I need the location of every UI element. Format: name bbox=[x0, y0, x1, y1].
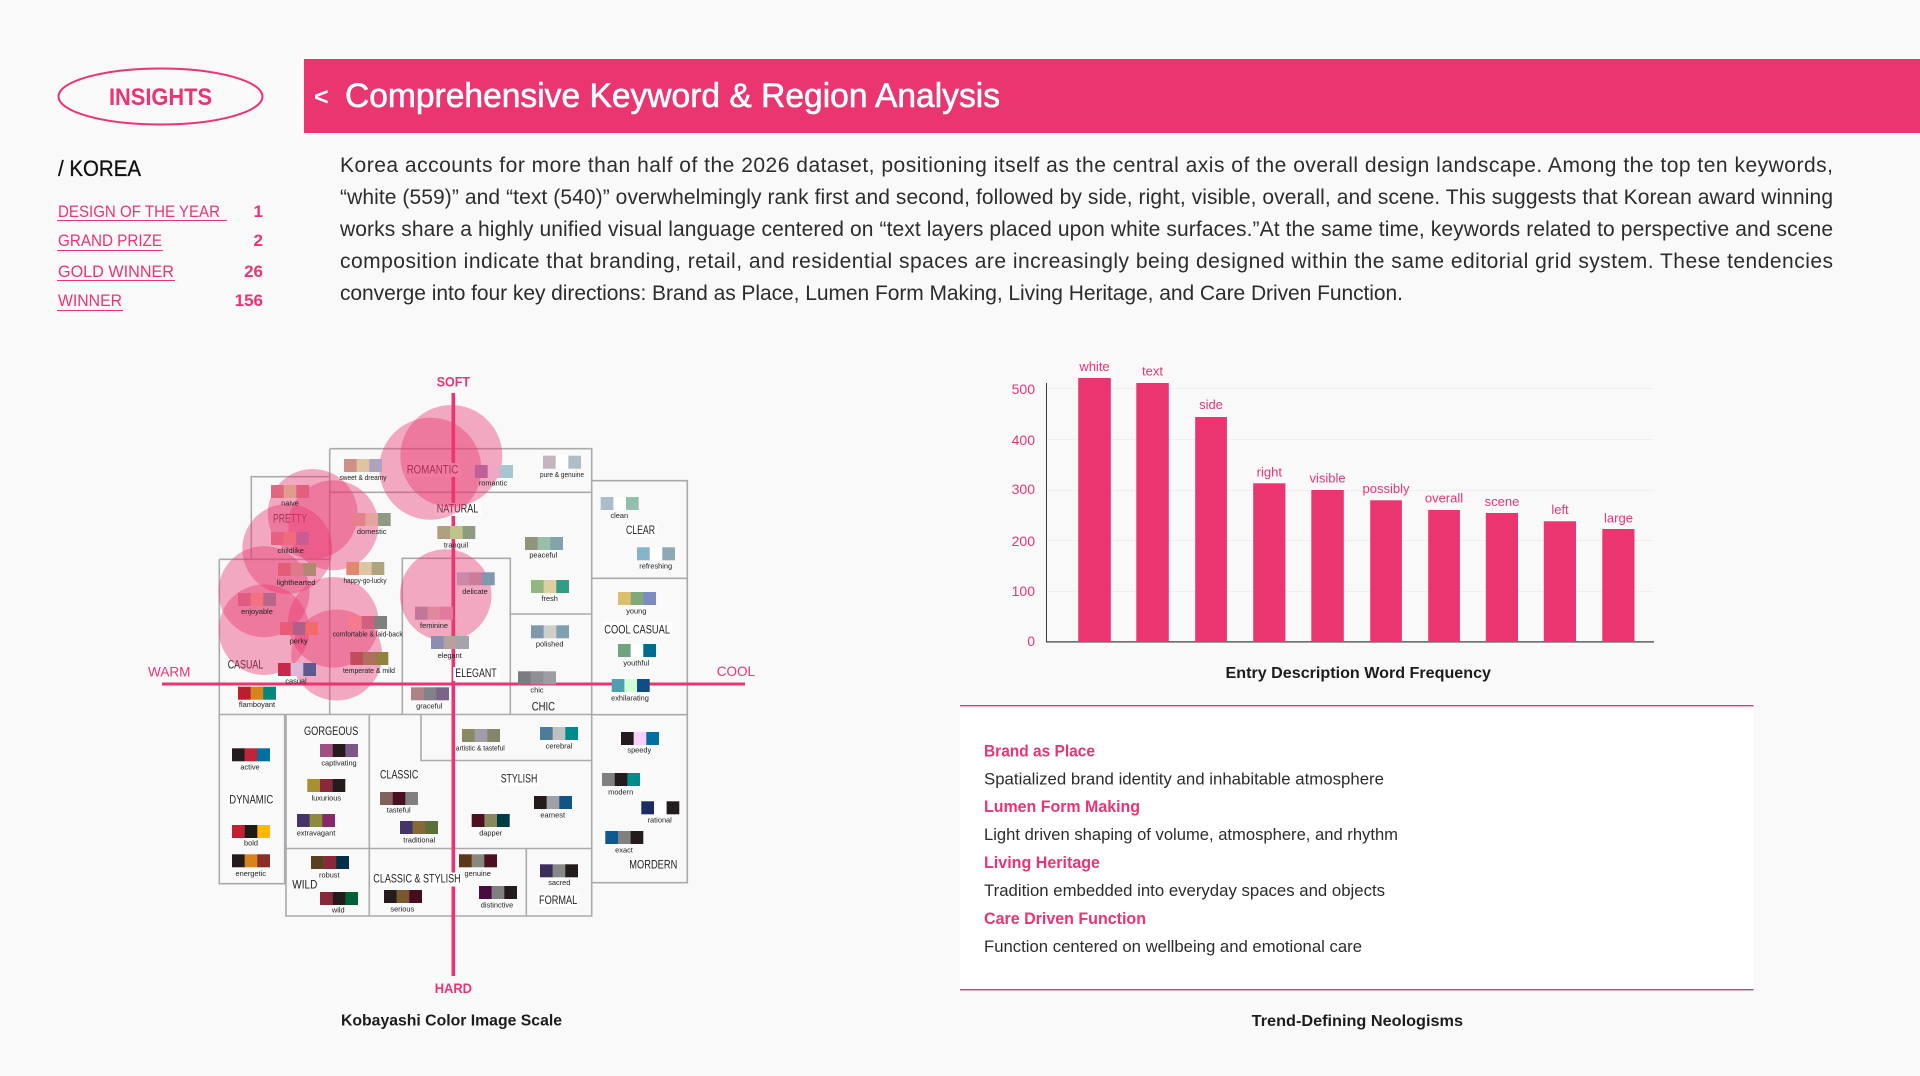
swatch: clean: clean bbox=[610, 511, 628, 520]
bar: scene bbox=[1485, 494, 1519, 642]
swatch: peaceful: peaceful bbox=[529, 551, 558, 560]
trend: Living Heritage: Tradition embedded into everyday spaces and objects bbox=[984, 881, 1385, 900]
y axis tick labels: 200 bbox=[1012, 533, 1035, 549]
category names: STYLISH bbox=[501, 774, 537, 786]
intro paragraph: works share a highly unified visual language centered on “text layers placed upon white surfaces.”At the same time, keywords related to perspective and scene bbox=[339, 218, 1833, 241]
swatch: lighthearted: lighthearted bbox=[277, 578, 315, 587]
trend: Brand as Place: Spatialized brand identity and inhabitable atmosphere bbox=[984, 769, 1384, 788]
intro paragraph bbox=[339, 154, 1833, 305]
swatch: naive bbox=[271, 485, 309, 508]
white label backings bbox=[228, 463, 672, 907]
bar: left bbox=[1544, 502, 1576, 642]
swatch: comfortable & laid-back bbox=[333, 616, 403, 639]
swatch: flamboyant: flamboyant bbox=[239, 700, 275, 709]
swatch: chic bbox=[518, 671, 556, 695]
bar: overall: overall bbox=[1425, 491, 1463, 506]
bar: large: large bbox=[1604, 511, 1633, 526]
caption: Kobayashi Color Image Scale: Kobayashi Color Image Scale bbox=[341, 1013, 562, 1030]
award: winner: 156 bbox=[235, 291, 263, 310]
swatch: captivating bbox=[320, 744, 358, 768]
bar: white: white bbox=[1078, 359, 1110, 374]
y axis tick labels: 500 bbox=[1012, 381, 1035, 397]
swatch: childlike bbox=[271, 532, 309, 555]
swatch: feminine: feminine bbox=[420, 621, 448, 630]
swatch: speedy: speedy bbox=[627, 746, 652, 755]
y axis tick labels: 400 bbox=[1012, 432, 1035, 448]
swatch: artistic & tasteful: artistic & tasteful bbox=[456, 744, 505, 753]
swatch: youthful bbox=[618, 644, 656, 668]
bar: large bbox=[1602, 511, 1634, 642]
award: grand prize: 2 bbox=[254, 231, 263, 250]
swatch: dapper bbox=[472, 814, 510, 837]
swatch: pure & genuine bbox=[540, 456, 584, 479]
category names: GORGEOUS bbox=[304, 726, 359, 738]
swatch: tasteful bbox=[380, 792, 418, 815]
swatch: graceful: graceful bbox=[416, 702, 443, 711]
intro paragraph: converge into four key directions: Brand as Place, Lumen Form Making, Living Heritage, and Care Driven Function. bbox=[340, 282, 1403, 305]
bar: side: side bbox=[1199, 397, 1223, 412]
bar: white bbox=[1078, 359, 1111, 642]
swatch: feminine bbox=[415, 607, 453, 630]
bar chart: word frequency bbox=[1012, 359, 1654, 649]
swatch: enjoyable: enjoyable bbox=[241, 607, 273, 616]
swatch: temperate & mild bbox=[343, 652, 395, 675]
swatch: luxurious: luxurious bbox=[312, 793, 341, 802]
category names: MORDERN bbox=[629, 860, 677, 872]
category names: PRETTY bbox=[273, 513, 307, 525]
swatch: domestic: domestic bbox=[357, 527, 387, 536]
award: design of the year: 1 bbox=[254, 202, 263, 221]
swatch: flamboyant bbox=[238, 687, 276, 709]
swatch: exhilarating bbox=[611, 679, 650, 703]
category names: CASUAL bbox=[228, 660, 264, 672]
horizontal axis: warm to cool bbox=[162, 682, 745, 686]
swatch: perky: perky bbox=[290, 637, 308, 646]
swatch: naive: naive bbox=[281, 499, 299, 508]
category names: CLASSIC & STYLISH bbox=[373, 873, 461, 885]
bar: possibly: possibly bbox=[1363, 481, 1410, 496]
chart gridlines bbox=[1047, 388, 1654, 592]
swatch: fresh: fresh bbox=[541, 594, 558, 603]
award: grand prize: GRAND PRIZE bbox=[58, 231, 162, 250]
award: winner bbox=[57, 291, 263, 311]
trend: Lumen Form Making bbox=[984, 797, 1398, 844]
category names: FORMAL bbox=[539, 895, 578, 907]
intro paragraph: Korea accounts for more than half of the 2026 dataset, positioning itself as the central axis of the overall design landscape. Among the top ten keywords, bbox=[340, 154, 1833, 177]
title banner bbox=[304, 59, 1920, 133]
award: design of the year: DESIGN OF THE YEAR bbox=[58, 202, 220, 221]
swatch: earnest bbox=[534, 796, 572, 819]
swatch: clean bbox=[601, 497, 639, 520]
swatch: modern: modern bbox=[608, 788, 633, 797]
category names: WILD bbox=[292, 879, 317, 891]
trend: Lumen Form Making: Light driven shaping of volume, atmosphere, and rhythm bbox=[984, 825, 1398, 844]
swatch: domestic bbox=[353, 513, 391, 536]
swatch: traditional: traditional bbox=[403, 836, 436, 845]
swatch: luxurious bbox=[307, 779, 345, 802]
region heading: Korea: / KOREA bbox=[58, 156, 141, 181]
swatch: childlike: childlike bbox=[278, 546, 304, 555]
trend: Brand as Place bbox=[984, 741, 1384, 788]
y axis tick labels bbox=[1012, 381, 1035, 649]
swatch: refreshing bbox=[637, 547, 675, 571]
insights badge bbox=[58, 68, 262, 124]
trend: Brand as Place: Brand as Place bbox=[984, 741, 1095, 760]
bar: visible: visible bbox=[1309, 471, 1346, 486]
swatch: perky bbox=[280, 622, 318, 646]
swatch: bold bbox=[232, 825, 270, 848]
swatch: polished bbox=[531, 625, 569, 649]
swatch: active: active bbox=[240, 762, 260, 771]
swatch: sacred: sacred bbox=[548, 878, 570, 887]
bar: overall bbox=[1425, 491, 1463, 642]
bar: text: text bbox=[1142, 364, 1163, 379]
swatch: exact bbox=[605, 831, 643, 854]
swatch: cerebral: cerebral bbox=[546, 742, 573, 751]
category names: ROMANTIC bbox=[407, 464, 458, 476]
swatch: robust bbox=[311, 856, 349, 879]
category grid bbox=[219, 449, 687, 916]
award: gold winner bbox=[57, 262, 263, 281]
swatch: extravagant bbox=[297, 814, 335, 838]
swatch: romantic: romantic bbox=[479, 479, 507, 488]
category names: NATURAL bbox=[437, 504, 479, 516]
swatch: temperate & mild: temperate & mild bbox=[343, 666, 395, 675]
y axis tick labels: 300 bbox=[1012, 481, 1035, 497]
swatch: exact: exact bbox=[615, 845, 633, 854]
swatch: genuine bbox=[459, 854, 497, 878]
insights badge: INSIGHTS bbox=[109, 84, 212, 111]
Kobayashi color image scale chart bbox=[148, 374, 755, 996]
highlight circles bbox=[218, 405, 502, 700]
bar: side bbox=[1195, 397, 1227, 642]
intro paragraph: composition indicate that branding, retail, and residential spaces are increasingly being designed within the same editorial grid system. These tendencies bbox=[340, 250, 1833, 273]
swatch: tranquil bbox=[437, 526, 475, 550]
category names: CLASSIC bbox=[380, 769, 418, 781]
swatch: serious bbox=[384, 890, 422, 913]
swatch: rational bbox=[641, 801, 679, 825]
vertical axis: soft to hard bbox=[452, 393, 455, 976]
swatch: delicate: delicate bbox=[462, 587, 488, 596]
swatch: active bbox=[232, 748, 270, 771]
axis label: hard: HARD bbox=[435, 980, 472, 996]
category names: ELEGANT bbox=[455, 668, 497, 680]
swatch: exhilarating: exhilarating bbox=[611, 694, 649, 703]
swatch: elegant bbox=[431, 636, 469, 660]
trend: Care Driven Function bbox=[984, 909, 1362, 956]
swatch: enjoyable bbox=[238, 593, 276, 616]
swatch: happy-go-lucky bbox=[344, 562, 387, 585]
swatch: youthful: youthful bbox=[623, 659, 650, 668]
swatch: refreshing: refreshing bbox=[639, 562, 672, 571]
award: gold winner: 26 bbox=[244, 262, 263, 281]
swatch: wild bbox=[320, 892, 358, 915]
swatch: serious: serious bbox=[390, 904, 415, 913]
bar: right: right bbox=[1257, 465, 1282, 480]
bar: text bbox=[1136, 364, 1169, 642]
swatch: extravagant: extravagant bbox=[297, 829, 335, 838]
swatch: comfortable & laid-back: comfortable & laid-back bbox=[333, 630, 403, 639]
swatch: genuine: genuine bbox=[465, 869, 491, 878]
trend: Care Driven Function: Function centered on wellbeing and emotional care bbox=[984, 937, 1362, 956]
swatch: lighthearted bbox=[277, 563, 316, 587]
caption: Trend-Defining Neologisms: Trend-Defining Neologisms bbox=[1252, 1013, 1463, 1030]
title banner: < bbox=[314, 83, 329, 111]
swatch: polished: polished bbox=[536, 640, 563, 649]
swatch: dapper: dapper bbox=[479, 828, 503, 837]
swatch: wild: wild bbox=[331, 906, 345, 915]
swatch: casual bbox=[278, 663, 316, 685]
swatch: happy-go-lucky: happy-go-lucky bbox=[344, 576, 387, 585]
intro paragraph: “white (559)” and “text (540)” overwhelmingly rank first and second, followed by side, right, visible, overall, and scene. This suggests that Korean award winning bbox=[340, 186, 1833, 209]
trend: Lumen Form Making: Lumen Form Making bbox=[984, 797, 1140, 816]
trend: Care Driven Function: Care Driven Function bbox=[984, 909, 1146, 928]
bar: right bbox=[1253, 465, 1285, 642]
swatch: graceful bbox=[411, 687, 449, 711]
swatch: romantic bbox=[475, 465, 513, 488]
panel: trend-defining neologisms bbox=[960, 705, 1754, 990]
swatch: distinctive bbox=[479, 886, 517, 909]
swatch: energetic: energetic bbox=[235, 869, 266, 878]
title banner: Comprehensive Keyword & Region Analysis bbox=[345, 77, 1000, 115]
caption: Entry Description Word Frequency: Entry Description Word Frequency bbox=[1226, 665, 1491, 682]
trend: Living Heritage: Living Heritage bbox=[984, 853, 1100, 872]
trend: Living Heritage bbox=[984, 853, 1385, 900]
swatch: bold: bold bbox=[244, 839, 258, 848]
y axis tick labels: 100 bbox=[1012, 583, 1035, 599]
category names: CLEAR bbox=[626, 525, 655, 537]
swatch: chic: chic bbox=[530, 686, 544, 695]
chart axes bbox=[1046, 383, 1654, 642]
swatch: peaceful bbox=[525, 537, 563, 560]
swatch: young bbox=[618, 592, 656, 615]
swatch: modern bbox=[602, 773, 640, 797]
bar: left: left bbox=[1551, 502, 1569, 517]
swatch: tasteful: tasteful bbox=[387, 806, 411, 815]
swatch: fresh bbox=[531, 580, 569, 603]
swatch: distinctive: distinctive bbox=[481, 900, 513, 909]
swatch: traditional bbox=[400, 821, 438, 845]
award: grand prize bbox=[57, 231, 263, 251]
axis label: soft: SOFT bbox=[437, 374, 470, 390]
swatch: artistic & tasteful bbox=[456, 729, 505, 753]
bar: possibly bbox=[1363, 481, 1410, 642]
swatch: rational: rational bbox=[648, 816, 672, 825]
y axis tick labels: 0 bbox=[1027, 633, 1035, 649]
swatch: tranquil: tranquil bbox=[444, 541, 468, 550]
award: gold winner: GOLD WINNER bbox=[58, 262, 174, 281]
swatch: robust: robust bbox=[319, 870, 340, 879]
swatch: energetic bbox=[232, 854, 270, 878]
swatch: pure & genuine: pure & genuine bbox=[540, 470, 584, 479]
award: winner: WINNER bbox=[58, 291, 122, 310]
category names: COOL CASUAL bbox=[604, 624, 670, 636]
swatch: sweet & dreamy bbox=[340, 459, 387, 482]
axis label: cool: COOL bbox=[717, 663, 755, 679]
swatch: sweet & dreamy: sweet & dreamy bbox=[340, 473, 387, 482]
swatch: earnest: earnest bbox=[540, 810, 565, 819]
swatch: sacred bbox=[540, 864, 578, 887]
swatch: delicate bbox=[457, 572, 495, 596]
swatch: elegant: elegant bbox=[438, 651, 462, 660]
axis label: warm: WARM bbox=[148, 664, 190, 680]
swatch: speedy bbox=[621, 732, 659, 755]
category names: DYNAMIC bbox=[229, 794, 273, 806]
swatch: captivating: captivating bbox=[321, 759, 357, 768]
swatch: casual: casual bbox=[285, 676, 307, 685]
awards list bbox=[57, 202, 263, 311]
swatch: cerebral bbox=[540, 727, 578, 751]
bar: scene: scene bbox=[1485, 494, 1519, 509]
bar: visible bbox=[1309, 471, 1346, 642]
category names bbox=[228, 464, 677, 907]
swatch: young: young bbox=[626, 606, 646, 615]
category names: CHIC bbox=[532, 702, 555, 714]
